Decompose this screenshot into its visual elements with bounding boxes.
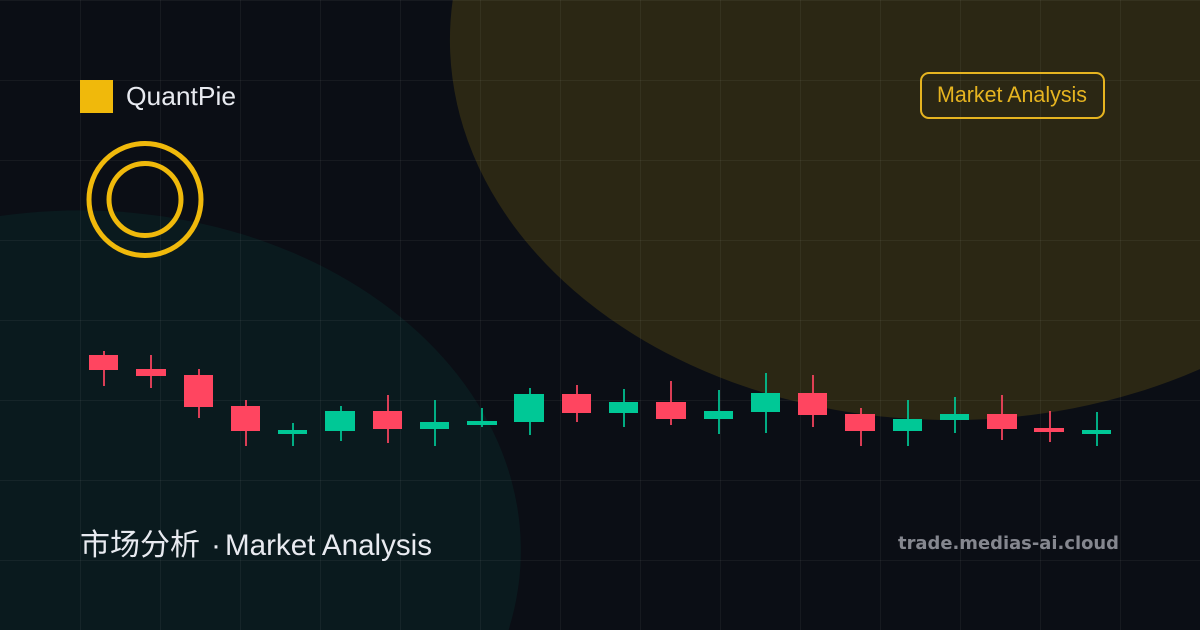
green candles: [278, 373, 1111, 446]
candlestick chart: [89, 351, 1111, 446]
domain label: trade.medias-ai.cloud: [898, 533, 1119, 554]
background blob: green ellipse: [0, 210, 521, 630]
badge: Market Analysis: [921, 73, 1104, 118]
badge: Market Analysis: Market Analysis: [937, 82, 1087, 107]
caption: 市场分析 · Market Analysis: Market Analysis: [225, 529, 432, 562]
background blob: gold ellipse: [450, 0, 1200, 420]
icon: concentric gold rings: [89, 144, 201, 256]
red candles: [89, 351, 1064, 446]
logo: gold square and QuantPie wordmark: [80, 80, 236, 113]
caption: 市场分析 · Market Analysis: ·: [211, 529, 221, 562]
icon: gold square: [80, 80, 113, 113]
brand name: QuantPie: [126, 81, 236, 111]
caption: 市场分析 · Market Analysis: 市场分析: [80, 520, 200, 564]
